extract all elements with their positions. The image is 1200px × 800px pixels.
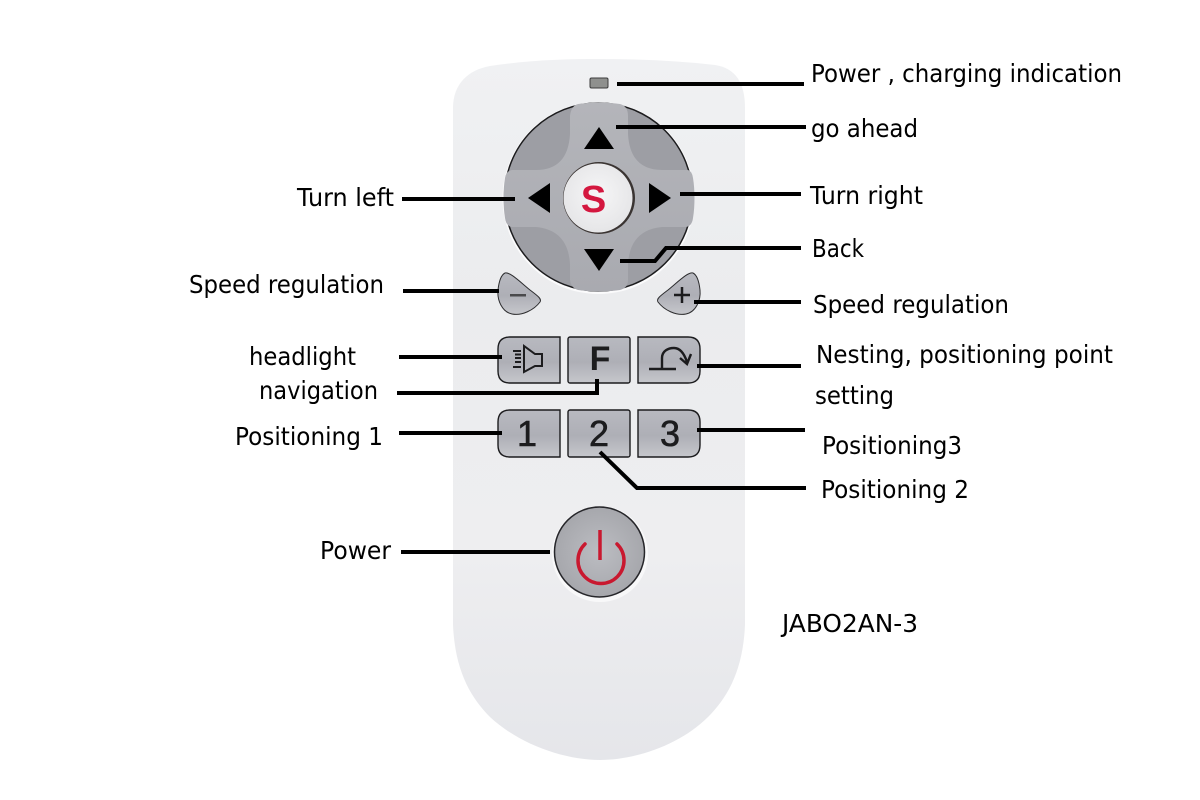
speed plus button	[657, 273, 700, 314]
stop button: S	[581, 179, 606, 221]
button 1: 1	[517, 413, 537, 454]
right arrow	[649, 183, 671, 213]
return button	[638, 337, 700, 383]
status LED	[590, 78, 608, 88]
leader lines	[397, 84, 806, 552]
label: speed regulation left: Speed regulation	[189, 270, 384, 299]
label: speed regulation right: Speed regulation	[813, 290, 1009, 319]
label: setting: setting	[815, 381, 894, 410]
label: turn right: Turn right	[809, 181, 923, 210]
button 3	[638, 410, 700, 457]
label: positioning 1: Positioning 1	[235, 422, 383, 451]
label: positioning 2: Positioning 2	[821, 475, 969, 504]
F button: F	[590, 340, 610, 378]
button 2: 2	[589, 413, 609, 454]
label: turn left: Turn left	[296, 183, 394, 212]
power button	[552, 506, 648, 602]
left arrow	[528, 183, 550, 213]
label: go ahead: go ahead	[811, 114, 918, 143]
label: positioning 3: Positioning3	[822, 431, 962, 460]
label: navigation: navigation	[259, 376, 378, 405]
label: power: Power	[320, 536, 392, 565]
model number: JABO2AN-3	[780, 609, 918, 638]
cross-shaped direction key	[504, 102, 694, 292]
speed minus button	[498, 273, 541, 314]
button 2	[568, 410, 630, 457]
F button	[568, 337, 630, 383]
label: power, charging indication: Power , charging indication	[811, 59, 1122, 88]
remote control body	[453, 59, 745, 760]
directional pad	[502, 102, 694, 294]
button 1	[498, 410, 560, 457]
button 3: 3	[660, 413, 680, 454]
label: back: Back	[812, 234, 864, 263]
label: headlight: headlight	[249, 342, 356, 371]
headlight button	[498, 337, 560, 383]
stop button	[563, 162, 635, 234]
label: nesting, positioning point: Nesting, positioning point	[816, 340, 1113, 369]
up arrow	[584, 127, 614, 149]
down arrow	[584, 249, 614, 271]
